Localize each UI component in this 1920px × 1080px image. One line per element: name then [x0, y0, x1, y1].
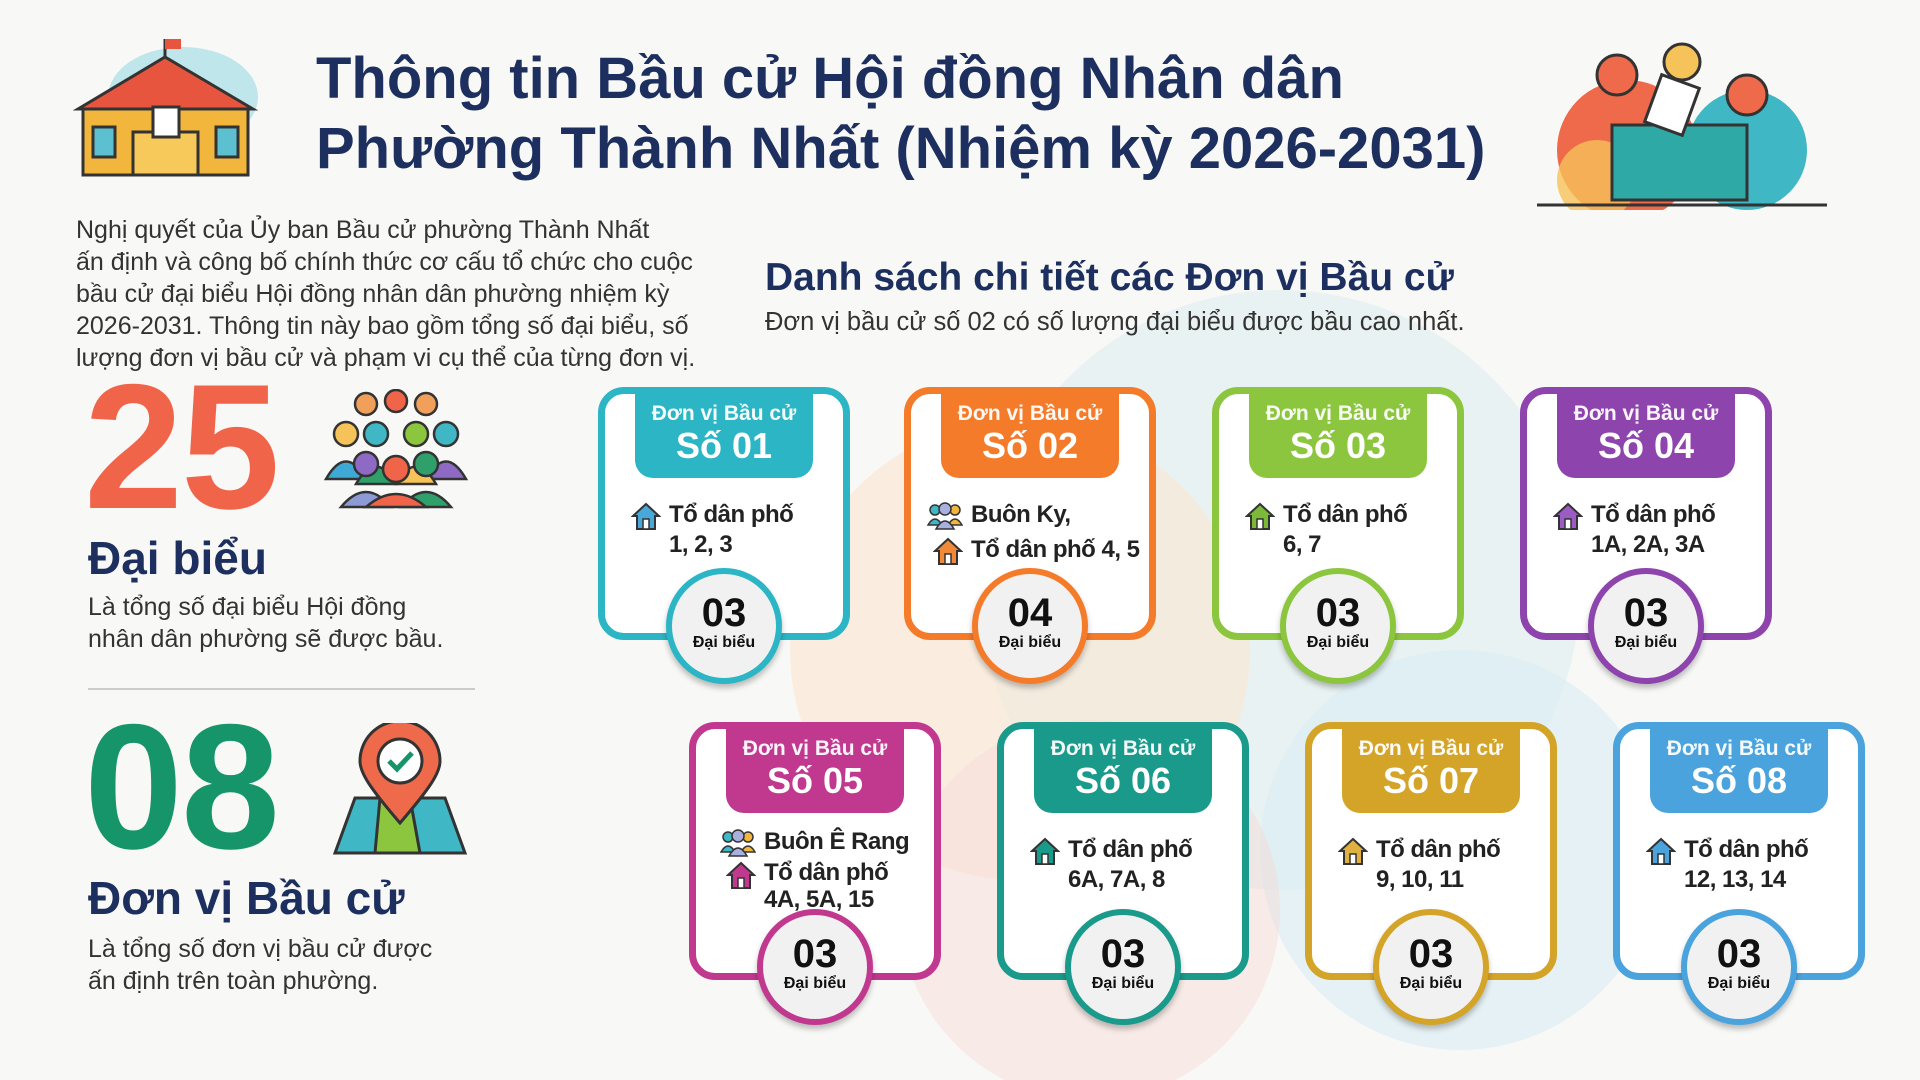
intro text: Nghị quyết của Ủy ban Bầu cử phường Thành Nhất [76, 216, 649, 244]
card: unit 05: Tổ dân phố [764, 859, 888, 886]
stat: 08 units: Là tổng số đơn vị bầu cử được [88, 935, 432, 963]
card: unit 05: Số 05 [767, 760, 863, 801]
stat: 25 delegates: Đại biểu [88, 532, 267, 584]
card: unit 05 [689, 722, 941, 980]
card: unit 03: 6, 7 [1283, 531, 1321, 558]
card: unit 07: 03 [1409, 932, 1453, 976]
card: unit 01: 03 [702, 591, 746, 635]
text: Đại biểu [1092, 975, 1154, 992]
section subtitle: Đơn vị bầu cử số 02 có số lượng đại biểu được bầu cao nhất. [765, 308, 1465, 336]
stat: 25 delegates: 25 [84, 347, 278, 546]
stat: 08 units: 08 [84, 687, 278, 886]
intro text [76, 215, 695, 372]
card: unit 04: 03 [1624, 591, 1668, 635]
card: unit 04 [1520, 387, 1772, 640]
card: unit 07 [1305, 722, 1557, 980]
background map shapes [790, 290, 1620, 1080]
card: unit 02: Tổ dân phố 4, 5 [971, 536, 1140, 563]
card: unit 08: Tổ dân phố [1684, 836, 1808, 863]
text: Đại biểu [693, 634, 755, 651]
card: unit 02: Đơn vị Bầu cử [958, 402, 1102, 425]
card: unit 03: 03 [1316, 591, 1360, 635]
text: Đại biểu [784, 975, 846, 992]
icon: people group [324, 389, 468, 508]
card: unit 02: Buôn Ky, [971, 501, 1071, 528]
card: unit 07: Đơn vị Bầu cử [1359, 737, 1503, 760]
card: unit 03: Tổ dân phố [1283, 501, 1407, 528]
intro text: bầu cử đại biểu Hội đồng nhân dân phường nhiệm kỳ [76, 280, 669, 308]
stat: 08 units [84, 687, 468, 995]
card: unit 01 [598, 387, 850, 640]
text: Đại biểu [1400, 975, 1462, 992]
card: unit 06: Đơn vị Bầu cử [1051, 737, 1195, 760]
stat: 25 delegates: nhân dân phường sẽ được bầu. [88, 625, 443, 653]
card: unit 06: 6A, 7A, 8 [1068, 866, 1165, 893]
text: Đại biểu [1708, 975, 1770, 992]
card: unit 02 [904, 387, 1156, 640]
intro text: ấn định và công bố chính thức cơ cấu tổ chức cho cuộc [76, 248, 693, 276]
card: unit 07: Số 07 [1383, 760, 1479, 801]
card: unit 08: Đơn vị Bầu cử [1667, 737, 1811, 760]
card: unit 04: Số 04 [1598, 425, 1694, 466]
icon: ballot box with people [1537, 42, 1827, 210]
title [316, 46, 1485, 181]
intro text: lượng đơn vị bầu cử và phạm vi cụ thể của từng đơn vị. [76, 344, 695, 372]
card: unit 01: 1, 2, 3 [669, 531, 732, 558]
card: unit 04: 1A, 2A, 3A [1591, 531, 1705, 558]
text: Đại biểu [999, 634, 1061, 651]
card: unit 03: Số 03 [1290, 425, 1386, 466]
card: unit 05: 03 [793, 932, 837, 976]
title: Thông tin Bầu cử Hội đồng Nhân dân [316, 46, 1344, 111]
card: unit 08: 03 [1717, 932, 1761, 976]
card: unit 08: Số 08 [1691, 760, 1787, 801]
intro text: 2026-2031. Thông tin này bao gồm tổng số đại biểu, số [76, 312, 688, 340]
text: Đại biểu [1307, 634, 1369, 651]
card: unit 06 [997, 722, 1249, 980]
stat: 25 delegates: Là tổng số đại biểu Hội đồng [88, 593, 406, 621]
card: unit 03 [1212, 387, 1464, 640]
card: unit 06: Tổ dân phố [1068, 836, 1192, 863]
title: Phường Thành Nhất (Nhiệm kỳ 2026-2031) [316, 116, 1485, 181]
card: unit 05: Buôn Ê Rang [764, 828, 909, 855]
card: unit 06: Số 06 [1075, 760, 1171, 801]
section heading: Danh sách chi tiết các Đơn vị Bầu cử [765, 256, 1454, 299]
card: unit 02: 04 [1008, 591, 1052, 635]
card: unit 01: Tổ dân phố [669, 501, 793, 528]
card: unit 01: Số 01 [676, 425, 772, 466]
card: unit 03: Đơn vị Bầu cử [1266, 402, 1410, 425]
card: unit 05: Đơn vị Bầu cử [743, 737, 887, 760]
text: Đại biểu [1615, 634, 1677, 651]
card: unit 08 [1613, 722, 1865, 980]
card: unit 04: Tổ dân phố [1591, 501, 1715, 528]
card: unit 08: 12, 13, 14 [1684, 866, 1786, 893]
card: unit 05: 4A, 5A, 15 [764, 886, 874, 913]
stat: 25 delegates [84, 347, 468, 653]
icon: school [73, 39, 258, 176]
card: unit 07: 9, 10, 11 [1376, 866, 1464, 893]
card: unit 07: Tổ dân phố [1376, 836, 1500, 863]
stat: 08 units: ấn định trên toàn phường. [88, 967, 378, 995]
stat: 08 units: Đơn vị Bầu cử [88, 872, 405, 924]
icon: map pin [332, 723, 468, 854]
card: unit 04: Đơn vị Bầu cử [1574, 402, 1718, 425]
card: unit 02: Số 02 [982, 425, 1078, 466]
card: unit 01: Đơn vị Bầu cử [652, 402, 796, 425]
card: unit 06: 03 [1101, 932, 1145, 976]
